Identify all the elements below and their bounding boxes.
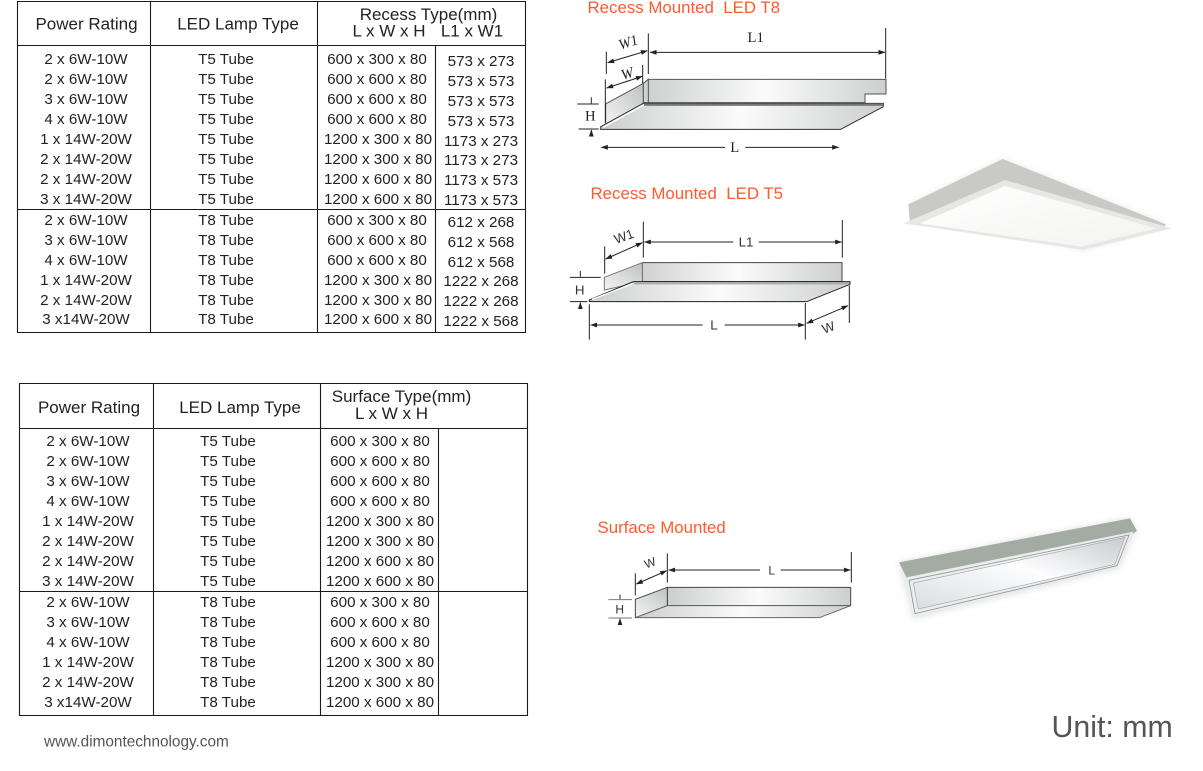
table rows: T5 tube: 573 x 573 bbox=[448, 73, 514, 90]
table rows: T5 tube: T5 Tube bbox=[198, 51, 254, 68]
table rows: T8 tube: 612 x 268 bbox=[448, 214, 514, 231]
surface rows: T8 tube bbox=[42, 594, 434, 711]
table rows: T8 tube: 1222 x 268 bbox=[443, 293, 519, 310]
table rows: T8 tube: 600 x 300 x 80 bbox=[327, 212, 427, 229]
surface rows: T8 tube: T8 Tube bbox=[200, 614, 256, 631]
table rows: T8 tube: 600 x 600 x 80 bbox=[327, 232, 427, 249]
table rows: T5 tube: 2 x 14W-20W bbox=[40, 151, 133, 168]
table rows: T8 tube: 3 x14W-20W bbox=[42, 311, 130, 328]
table rows: T8 tube bbox=[40, 212, 519, 330]
surface rows: T8 tube: 3 x14W-20W bbox=[44, 694, 132, 711]
surface dimension labels: H bbox=[615, 602, 624, 616]
panel housing bbox=[908, 159, 1166, 228]
surface dimension labels: L bbox=[768, 563, 775, 577]
surface dimension labels: W bbox=[642, 554, 658, 571]
surface rows: T8 tube: T8 Tube bbox=[200, 594, 256, 611]
fixture shadow bbox=[899, 518, 1136, 618]
table rows: T8 tube: T8 Tube bbox=[198, 252, 254, 269]
surface rows: T5 tube: 1200 x 300 x 80 bbox=[326, 513, 434, 530]
table rows: T5 tube: T5 Tube bbox=[198, 71, 254, 88]
table header: L1 x W1 bbox=[441, 22, 503, 40]
T5 dimension labels: W bbox=[820, 318, 837, 337]
table rows: T5 tube: 1 x 14W-20W bbox=[40, 131, 133, 148]
T8 dimension labels: H bbox=[585, 109, 596, 125]
table rows: T5 tube: 1173 x 573 bbox=[444, 172, 518, 189]
surface table header: Surface Type(mm) bbox=[332, 387, 471, 406]
table rows: T5 tube: T5 Tube bbox=[198, 191, 254, 208]
unit note: Unit: mm bbox=[1052, 711, 1173, 744]
table rows: T5 tube: 2 x 6W-10W bbox=[44, 51, 128, 68]
T5 dimension labels: H bbox=[575, 283, 584, 298]
table rows: T8 tube: 2 x 14W-20W bbox=[40, 292, 133, 309]
image: recessed LED panel photo bbox=[903, 159, 1172, 250]
surface rows: T5 tube: 1200 x 600 x 80 bbox=[326, 553, 434, 570]
surface rows: T5 tube: 600 x 600 x 80 bbox=[330, 493, 430, 510]
surface rows: T5 tube: T5 Tube bbox=[200, 553, 256, 570]
heading: recess mounted T5: Recess Mounted LED T5 bbox=[590, 184, 783, 203]
table grid lines bbox=[18, 2, 526, 332]
table rows: T5 tube: T5 Tube bbox=[198, 151, 254, 168]
panel frame bbox=[903, 180, 1172, 250]
surface rows: T8 tube: 600 x 600 x 80 bbox=[330, 634, 430, 651]
table rows: T5 tube: 1200 x 300 x 80 bbox=[324, 131, 432, 148]
fixture frame bbox=[905, 532, 1133, 618]
surface rows: T5 tube: 1200 x 600 x 80 bbox=[326, 573, 434, 590]
panel shadow bbox=[908, 159, 1168, 250]
surface rows: T8 tube: T8 Tube bbox=[200, 634, 256, 651]
surface rows: T8 tube: 1200 x 600 x 80 bbox=[326, 694, 434, 711]
diagram: recess mounted T8 bbox=[577, 28, 886, 156]
table rows: T5 tube: 600 x 600 x 80 bbox=[327, 71, 427, 88]
surface dimension labels bbox=[615, 554, 775, 616]
surface table header bbox=[38, 387, 471, 423]
surface rows: T5 tube: 2 x 6W-10W bbox=[46, 453, 130, 470]
T5 dimension labels: L1 bbox=[739, 234, 753, 249]
surface rows: T8 tube: T8 Tube bbox=[200, 694, 256, 711]
table rows: T8 tube: T8 Tube bbox=[198, 232, 254, 249]
T5 dimension lines bbox=[570, 220, 849, 340]
surface rows: T8 tube: 600 x 600 x 80 bbox=[330, 614, 430, 631]
surface rows: T8 tube: 1 x 14W-20W bbox=[42, 654, 135, 671]
table rows: T5 tube: T5 Tube bbox=[198, 91, 254, 108]
table rows: T5 tube: 1200 x 600 x 80 bbox=[324, 171, 432, 188]
table rows: T5 tube: 600 x 300 x 80 bbox=[327, 51, 427, 68]
table header: Recess Type(mm) bbox=[360, 5, 497, 24]
surface table header: Power Rating bbox=[38, 398, 140, 417]
table rows: T8 tube: 4 x 6W-10W bbox=[44, 252, 128, 269]
T8 dimension lines bbox=[577, 28, 886, 147]
table rows: T8 tube: 1222 x 568 bbox=[443, 313, 519, 330]
surface rows: T5 tube: 600 x 600 x 80 bbox=[330, 473, 430, 490]
surface table header: L x W x H bbox=[355, 404, 428, 423]
table rows: T5 tube: 4 x 6W-10W bbox=[44, 111, 128, 128]
panel diffuser bbox=[920, 186, 1157, 247]
table header bbox=[35, 5, 503, 40]
panel: recess type table bbox=[18, 2, 526, 332]
surface rows: T5 tube: 2 x 14W-20W bbox=[42, 533, 135, 550]
surface rows: T5 tube: T5 Tube bbox=[200, 453, 256, 470]
diagram: recess mounted T5 bbox=[570, 220, 850, 340]
T5 dimension labels: L bbox=[710, 317, 718, 332]
table rows: T5 tube bbox=[40, 51, 518, 209]
T8 dimension labels bbox=[585, 30, 764, 156]
table header: L x W x H bbox=[352, 22, 426, 40]
surface rows: T5 tube: 2 x 6W-10W bbox=[46, 433, 130, 450]
surface fixture body bbox=[635, 587, 851, 618]
surface rows: T5 tube: T5 Tube bbox=[200, 533, 256, 550]
heading: surface mounted: Surface Mounted bbox=[598, 518, 726, 537]
table rows: T8 tube: 1200 x 300 x 80 bbox=[324, 272, 432, 289]
fixture housing bbox=[899, 518, 1137, 582]
table rows: T5 tube: 1173 x 573 bbox=[444, 192, 518, 209]
surface rows: T5 tube: T5 Tube bbox=[200, 573, 256, 590]
table rows: T5 tube: 600 x 600 x 80 bbox=[327, 91, 427, 108]
table rows: T8 tube: 600 x 600 x 80 bbox=[327, 252, 427, 269]
T8 fixture body bbox=[601, 79, 886, 129]
table rows: T5 tube: 600 x 600 x 80 bbox=[327, 111, 427, 128]
table rows: T8 tube: 612 x 568 bbox=[448, 234, 514, 251]
table rows: T5 tube: 3 x 6W-10W bbox=[44, 91, 128, 108]
table rows: T5 tube: 573 x 573 bbox=[448, 93, 514, 110]
surface rows: T5 tube: 1 x 14W-20W bbox=[42, 513, 135, 530]
surface rows: T8 tube: 2 x 14W-20W bbox=[42, 674, 135, 691]
T8 dimension labels: W bbox=[619, 64, 637, 84]
surface rows: T8 tube: 3 x 6W-10W bbox=[46, 614, 130, 631]
table rows: T5 tube: 573 x 573 bbox=[448, 113, 514, 130]
diagram: surface mounted bbox=[608, 552, 851, 624]
table rows: T5 tube: 573 x 273 bbox=[448, 53, 514, 70]
T5 dimension labels: W1 bbox=[612, 226, 636, 247]
table rows: T8 tube: T8 Tube bbox=[198, 311, 254, 328]
table rows: T8 tube: 1 x 14W-20W bbox=[40, 272, 133, 289]
fixture frame inner line bbox=[909, 535, 1129, 614]
surface rows: T8 tube: 4 x 6W-10W bbox=[46, 634, 130, 651]
table rows: T5 tube: 1173 x 273 bbox=[444, 133, 518, 150]
T5 dimension labels bbox=[575, 226, 837, 337]
table rows: T5 tube: 1200 x 600 x 80 bbox=[324, 191, 432, 208]
website footer: www.dimontechnology.com bbox=[43, 734, 229, 750]
surface rows: T8 tube: T8 Tube bbox=[200, 654, 256, 671]
surface rows: T5 tube: T5 Tube bbox=[200, 493, 256, 510]
table rows: T8 tube: 1200 x 600 x 80 bbox=[324, 311, 432, 328]
table rows: T8 tube: 612 x 568 bbox=[448, 254, 514, 271]
image: surface mounted panel photo bbox=[899, 518, 1137, 618]
surface rows: T8 tube: 1200 x 300 x 80 bbox=[326, 654, 434, 671]
surface rows: T5 tube: 1200 x 300 x 80 bbox=[326, 533, 434, 550]
surface rows: T8 tube: 2 x 6W-10W bbox=[46, 594, 130, 611]
table rows: T5 tube: 1173 x 273 bbox=[444, 152, 518, 169]
surface table grid lines bbox=[20, 384, 528, 716]
table rows: T5 tube: T5 Tube bbox=[198, 131, 254, 148]
surface rows: T5 tube: 3 x 14W-20W bbox=[42, 573, 135, 590]
table rows: T5 tube: 1200 x 300 x 80 bbox=[324, 151, 432, 168]
surface rows: T5 tube: T5 Tube bbox=[200, 433, 256, 450]
table header: LED Lamp Type bbox=[177, 14, 299, 34]
table rows: T8 tube: 1222 x 268 bbox=[443, 273, 519, 290]
surface rows: T5 tube: 4 x 6W-10W bbox=[46, 493, 130, 510]
table rows: T8 tube: T8 Tube bbox=[198, 272, 254, 289]
surface rows: T8 tube: 1200 x 300 x 80 bbox=[326, 674, 434, 691]
surface dimension lines bbox=[608, 552, 851, 624]
table rows: T8 tube: 1200 x 300 x 80 bbox=[324, 292, 432, 309]
table rows: T5 tube: T5 Tube bbox=[198, 111, 254, 128]
surface rows: T5 tube bbox=[42, 433, 434, 590]
panel: surface type table bbox=[20, 384, 528, 716]
surface rows: T5 tube: 2 x 14W-20W bbox=[42, 553, 135, 570]
table rows: T8 tube: T8 Tube bbox=[198, 292, 254, 309]
surface rows: T8 tube: 600 x 300 x 80 bbox=[330, 594, 430, 611]
table rows: T5 tube: 3 x 14W-20W bbox=[40, 191, 133, 208]
T8 dimension labels: W1 bbox=[617, 32, 640, 54]
surface rows: T5 tube: 600 x 300 x 80 bbox=[330, 433, 430, 450]
table rows: T8 tube: 3 x 6W-10W bbox=[44, 232, 128, 249]
surface rows: T5 tube: T5 Tube bbox=[200, 513, 256, 530]
table rows: T8 tube: 2 x 6W-10W bbox=[44, 212, 128, 229]
T5 fixture body bbox=[589, 263, 850, 302]
table rows: T8 tube: T8 Tube bbox=[198, 212, 254, 229]
table header: Power Rating bbox=[35, 14, 138, 34]
T8 dimension labels: L bbox=[730, 140, 739, 156]
T8 dimension labels: L1 bbox=[748, 30, 764, 46]
surface rows: T5 tube: 3 x 6W-10W bbox=[46, 473, 130, 490]
fixture diffuser bbox=[913, 537, 1125, 609]
surface rows: T5 tube: 600 x 600 x 80 bbox=[330, 453, 430, 470]
table rows: T5 tube: 2 x 14W-20W bbox=[40, 171, 133, 188]
table rows: T5 tube: 2 x 6W-10W bbox=[44, 71, 128, 88]
surface rows: T8 tube: T8 Tube bbox=[200, 674, 256, 691]
surface table header: LED Lamp Type bbox=[179, 398, 301, 417]
table rows: T5 tube: T5 Tube bbox=[198, 171, 254, 188]
surface rows: T5 tube: T5 Tube bbox=[200, 473, 256, 490]
